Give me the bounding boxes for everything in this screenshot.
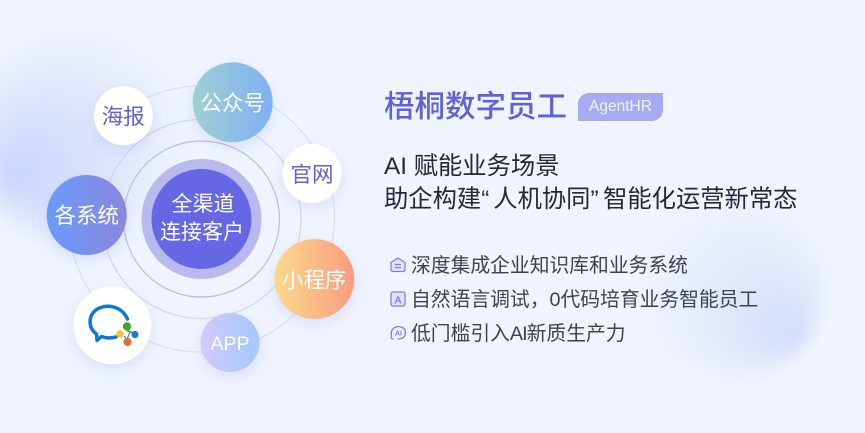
subtitle: 助企构建“人机协同”智能化运营新常态 — [384, 186, 797, 213]
center hub — [142, 159, 262, 279]
node: 官网: 官网 — [290, 163, 334, 187]
node: 小程序: 小程序 — [282, 268, 347, 292]
node: 官网 — [282, 144, 342, 203]
node: 公众号: 公众号 — [200, 92, 265, 116]
node: 公众号 — [193, 62, 273, 142]
center hub: 连接客户 — [160, 221, 244, 244]
node: APP — [200, 313, 260, 372]
node: APP: APP — [210, 333, 250, 355]
tag: AgentHR: AgentHR — [589, 98, 652, 115]
center hub: 全渠道 — [172, 193, 234, 216]
node: 海报 — [94, 86, 153, 145]
list item 2: 自然语言调试，0代码培育业务智能员工 — [411, 289, 758, 311]
feature list — [390, 254, 758, 345]
icon: A card — [390, 291, 406, 307]
list item 1: 深度集成企业知识库和业务系统 — [411, 255, 688, 277]
tag: AgentHR — [578, 93, 663, 121]
icon: AI bubble: AI — [395, 330, 402, 338]
node: 海报: 海报 — [102, 105, 145, 129]
node: 各系统 — [47, 175, 127, 255]
icon: AI bubble — [390, 326, 406, 340]
node: 各系统: 各系统 — [54, 204, 119, 228]
title: 梧桐数字员工 — [384, 90, 567, 124]
node: WeCom icon — [73, 286, 151, 364]
icon: knowledge house — [390, 257, 406, 272]
node: 小程序 — [274, 239, 354, 319]
subtitle — [384, 153, 797, 213]
icon: A card: A — [394, 294, 402, 306]
list item 3: 低门槛引入AI新质生产力 — [411, 323, 626, 345]
subtitle: AI 赋能业务场景 — [384, 153, 560, 180]
